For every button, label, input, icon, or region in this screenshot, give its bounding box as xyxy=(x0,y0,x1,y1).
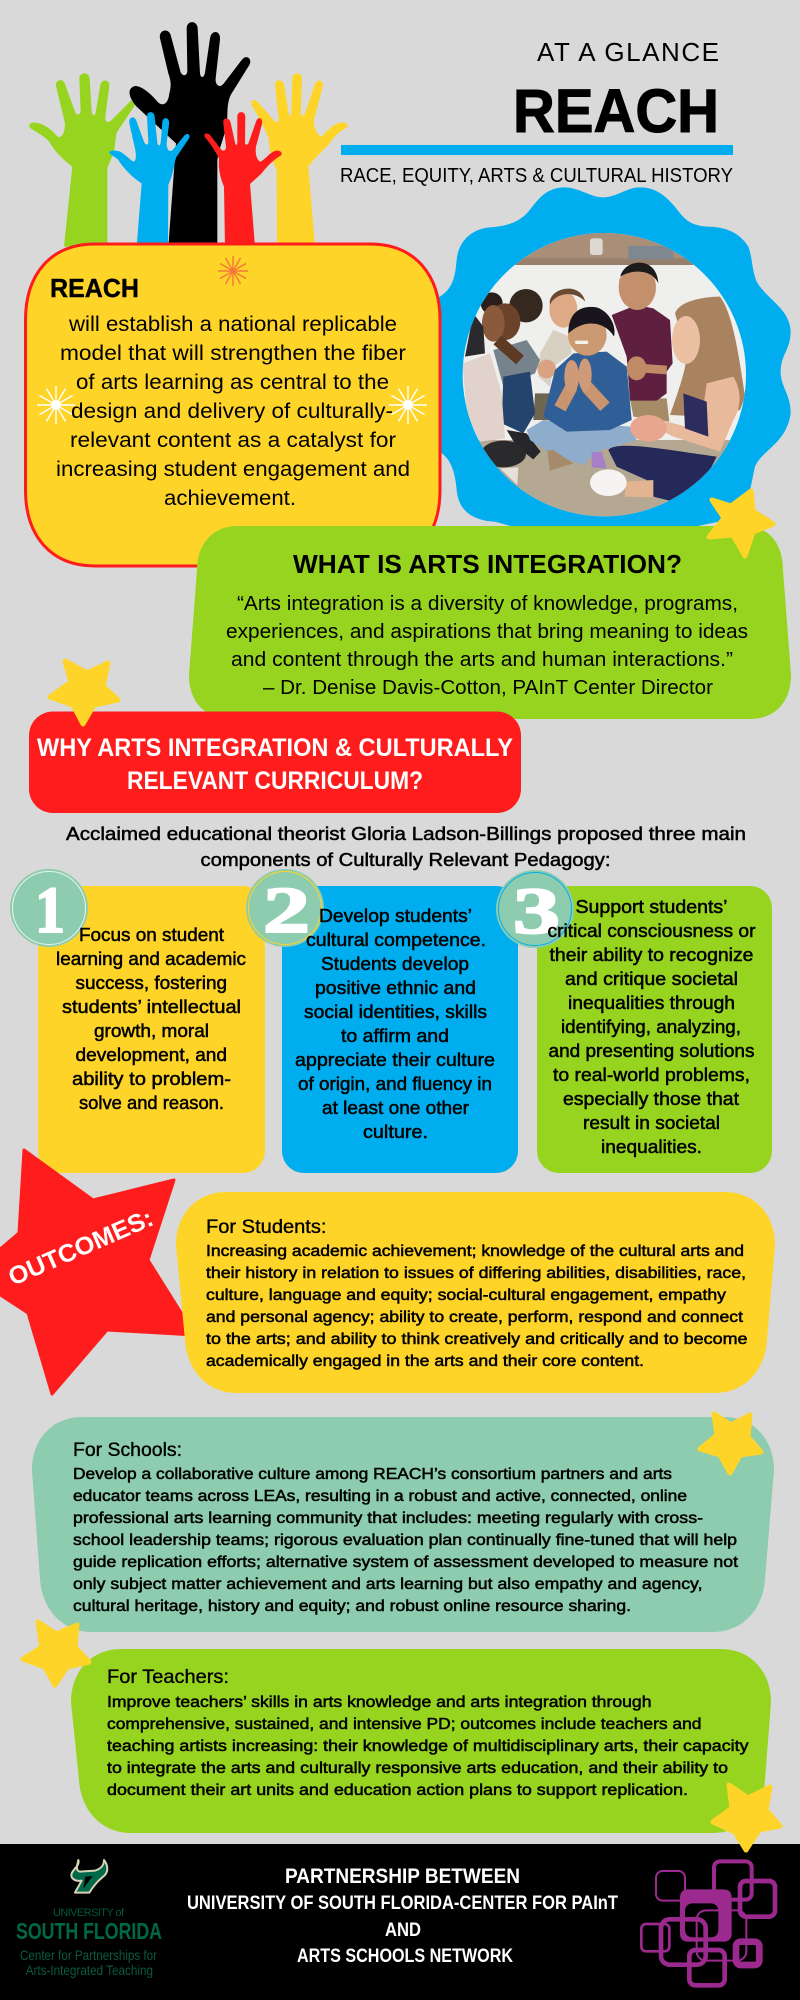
icon: orange starburst xyxy=(218,256,248,286)
text block: REACH description: will establish a national replicable xyxy=(68,313,397,336)
panel: for students: culture, language and equity; social-cultural engagement, empathy xyxy=(206,1287,726,1304)
panel: for students: For Students: xyxy=(206,1217,326,1238)
panel: for schools: educator teams across LEAs, resulting in a robust and active, connected, online xyxy=(73,1488,687,1505)
panel: for students: to the arts; and ability to think creatively and critically and to become xyxy=(206,1331,748,1348)
card 2 text: of origin, and fluency in xyxy=(298,1074,492,1094)
panel: for schools: Develop a collaborative culture among REACH’s consortium partners and arts xyxy=(73,1466,672,1483)
subtitle: RACE, EQUITY, ARTS & CULTURAL HISTORY xyxy=(340,165,733,187)
card 3 text: their ability to recognize xyxy=(550,945,754,965)
text block: REACH description: increasing student engagement and xyxy=(56,458,410,481)
heading: WHAT IS ARTS INTEGRATION? xyxy=(293,549,682,579)
USF wordmark xyxy=(16,1907,162,1978)
panel: for schools: professional arts learning community that includes: meeting regularly with cross- xyxy=(73,1510,703,1527)
text block: REACH description xyxy=(56,313,410,510)
quote xyxy=(226,592,748,699)
quote: – Dr. Denise Davis-Cotton, PAInT Center Director xyxy=(263,676,713,699)
sub: child with dark hair xyxy=(481,289,543,459)
panel: for students: their history in relation to issues of differing abilities, disabilities, race, xyxy=(206,1265,746,1282)
icon: white starburst right xyxy=(389,386,427,424)
photo: children clapping in a circle xyxy=(460,230,750,520)
card 3 text xyxy=(548,897,756,1157)
panel: for teachers: document their art units and education action plans to support replication. xyxy=(107,1782,688,1799)
icon: USF bull logo xyxy=(71,1860,107,1893)
text block: intro paragraph: Acclaimed educational theorist Gloria Ladson-Billings proposed three main xyxy=(66,823,746,844)
USF wordmark: UNIVERSITY of xyxy=(53,1907,125,1919)
number badge 3: 3 xyxy=(513,875,560,948)
panel: for teachers: teaching artists increasing: their knowledge of multidisciplinary arts, their capacity xyxy=(107,1738,749,1755)
card 1 background xyxy=(38,886,265,1173)
sub: back middle boy xyxy=(533,289,585,420)
text block: intro paragraph: components of Culturally Relevant Pedagogy: xyxy=(200,849,610,870)
card 2 text: Students develop xyxy=(321,954,469,974)
icon: white starburst left xyxy=(37,386,75,424)
text block: intro paragraph xyxy=(66,823,746,870)
partnership text: PARTNERSHIP BETWEEN xyxy=(285,1865,520,1888)
card 3 text: and critique societal xyxy=(565,969,738,989)
panel: for teachers: comprehensive, sustained, and intensive PD; outcomes include teachers and xyxy=(107,1716,702,1733)
text block: REACH description: of arts learning as central to the xyxy=(76,371,389,394)
icon: yellow star on schools panel xyxy=(700,1414,761,1473)
card 1 text: learning and academic xyxy=(56,949,246,969)
card 2 text: social identities, skills xyxy=(304,1002,487,1022)
panel heading: REACH xyxy=(50,273,139,303)
icon: yellow star on teachers panel xyxy=(23,1622,89,1685)
panel: for schools: guide replication efforts; alternative system of assessment developed to measure not xyxy=(73,1554,739,1571)
card 2 text: positive ethnic and xyxy=(315,978,476,998)
card 2 text: at least one other xyxy=(322,1098,469,1118)
panel: why heading: WHY ARTS INTEGRATION & CULTURALLY xyxy=(37,734,513,762)
panel: why heading xyxy=(29,712,521,813)
USF wordmark: Arts-Integrated Teaching xyxy=(26,1962,153,1978)
panel: for students xyxy=(176,1192,775,1393)
card 1 text: students’ intellectual xyxy=(62,997,241,1017)
card 2 text: culture. xyxy=(363,1122,428,1142)
panel: for teachers: For Teachers: xyxy=(107,1667,229,1688)
panel: for schools: school leadership teams; rigorous evaluation plan continually fine-tuned that will help xyxy=(73,1532,737,1549)
card 1 text: solve and reason. xyxy=(79,1093,224,1113)
card 3 background xyxy=(537,886,772,1173)
card 3 text: Support students’ xyxy=(576,897,728,917)
panel: for schools xyxy=(32,1417,774,1632)
card 1 text: growth, moral xyxy=(94,1021,209,1041)
panel: why heading: RELEVANT CURRICULUM? xyxy=(127,767,423,795)
footer band xyxy=(0,1844,800,2000)
card 3 text: identifying, analyzing, xyxy=(561,1017,741,1037)
panel: for students: academically engaged in the arts and their core content. xyxy=(206,1353,644,1370)
text block: REACH description: design and delivery of culturally- xyxy=(71,400,393,423)
text block: REACH description: achievement. xyxy=(164,487,296,510)
card 3 text: to real-world problems, xyxy=(553,1065,750,1085)
USF wordmark: SOUTH FLORIDA xyxy=(16,1918,162,1944)
card 3 text: and presenting solutions xyxy=(548,1041,754,1061)
partnership text xyxy=(187,1865,618,1967)
card 2 text: to affirm and xyxy=(341,1026,449,1046)
icon: yellow star bottom right xyxy=(713,1785,780,1850)
panel: for schools: only subject matter achievement and arts learning but also empathy and agency, xyxy=(73,1576,702,1593)
card 2 text: Develop students’ xyxy=(319,906,472,926)
USF wordmark: Center for Partnerships for xyxy=(20,1947,157,1963)
card 1 text: Focus on student xyxy=(79,925,224,945)
quote: experiences, and aspirations that bring meaning to ideas xyxy=(226,620,748,643)
number badge 3 xyxy=(496,870,574,948)
quote: “Arts integration is a diversity of knowledge, programs, xyxy=(237,592,738,615)
partnership text: AND xyxy=(385,1920,421,1941)
card 3 text: result in societal xyxy=(583,1113,720,1133)
card 3 text: inequalities through xyxy=(568,993,735,1013)
panel: what REACH is xyxy=(26,244,440,566)
panel: what is arts integration xyxy=(189,526,791,719)
panel: for teachers xyxy=(71,1649,771,1833)
card 3 text: especially those that xyxy=(563,1089,739,1109)
card 2 background xyxy=(282,886,518,1173)
number badge 1 xyxy=(10,869,88,947)
number badge 1: 1 xyxy=(35,874,65,947)
blue title bar xyxy=(341,145,733,155)
panel: for teachers: to integrate the arts and culturally responsive arts education, and their ability to xyxy=(107,1760,728,1777)
icon: red outcomes star: OUTCOMES: xyxy=(4,1204,158,1292)
title: at a glance: AT A GLANCE xyxy=(537,37,719,67)
sub: right girl xyxy=(590,297,745,502)
card 1 text: development, and xyxy=(76,1045,227,1065)
card 3 text: critical consciousness or xyxy=(548,921,756,941)
panel: for schools: For Schools: xyxy=(73,1440,182,1461)
panel: for students: and personal agency; ability to create, perform, respond and connect xyxy=(206,1309,744,1326)
partnership text: UNIVERSITY OF SOUTH FLORIDA-CENTER FOR PAInT xyxy=(187,1893,618,1914)
quote: and content through the arts and human interactions.” xyxy=(231,648,733,671)
sub: left child xyxy=(463,313,526,485)
sub: front centre girl xyxy=(527,307,637,471)
card 1 text: success, fostering xyxy=(76,973,227,993)
title: REACH: REACH xyxy=(513,77,719,145)
icon: purple overlapping squares logo xyxy=(641,1861,775,1985)
text block: REACH description: relevant content as a catalyst for xyxy=(70,429,396,452)
icon: yellow star left xyxy=(50,661,118,724)
panel: for schools: cultural heritage, history and equity; and robust online resource sharing. xyxy=(73,1598,631,1615)
card 1 text: ability to problem- xyxy=(72,1069,231,1089)
card 3 text: inequalities. xyxy=(601,1137,702,1157)
icon: red outcomes star xyxy=(0,1150,195,1394)
card 1 text xyxy=(56,925,246,1113)
panel: for students: Increasing academic achievement; knowledge of the cultural arts and xyxy=(206,1243,744,1260)
text block: REACH description: model that will strengthen the fiber xyxy=(60,342,406,365)
icon: yellow star top right xyxy=(709,491,773,556)
panel: for teachers: Improve teachers’ skills in arts knowledge and arts integration through xyxy=(107,1694,652,1711)
card 2 text: appreciate their culture xyxy=(295,1050,495,1070)
card 2 text xyxy=(295,906,495,1142)
partnership text: ARTS SCHOOLS NETWORK xyxy=(297,1946,513,1967)
blue wavy blob with photo xyxy=(437,187,791,527)
number badge 2 xyxy=(246,869,324,947)
number badge 2: 2 xyxy=(263,874,310,947)
icon: raised hands xyxy=(29,22,347,247)
sub: back right boy xyxy=(612,263,673,422)
card 2 text: cultural competence. xyxy=(306,930,486,950)
